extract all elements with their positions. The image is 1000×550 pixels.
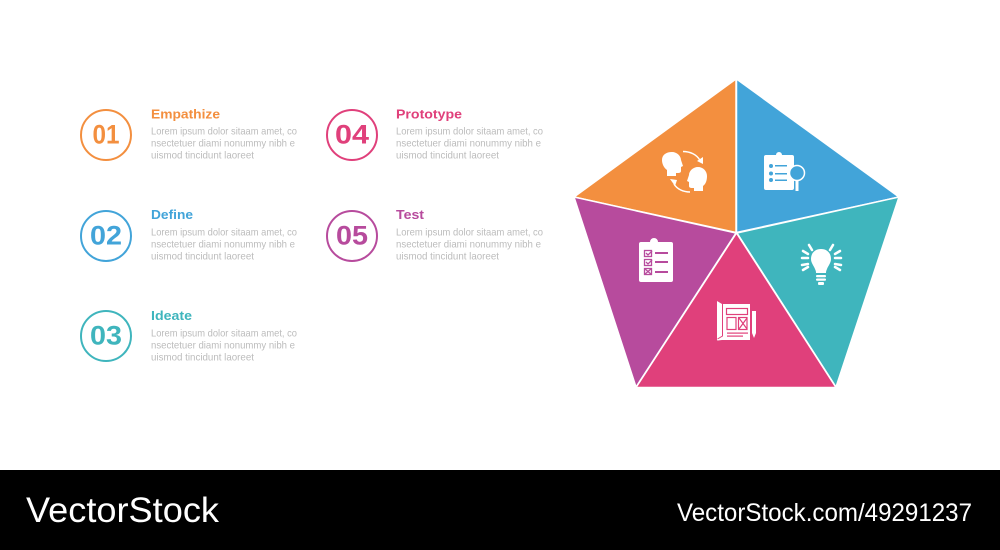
- number badge 02: [81, 211, 131, 261]
- description text: Lorem ipsum dolor sitaam amet, co: [396, 226, 543, 238]
- segment: purple: [574, 197, 736, 387]
- description text: [151, 328, 297, 364]
- description text: [396, 126, 543, 162]
- number badge 04: [327, 110, 377, 160]
- description text: [151, 226, 297, 262]
- description text: Lorem ipsum dolor sitaam amet, co: [151, 328, 297, 340]
- description text: uismod tincidunt laoreet: [151, 150, 254, 162]
- list item 01: Empathize: [81, 106, 297, 162]
- icon: clipboard with magnifier: [764, 152, 804, 191]
- number badge 02: 02: [90, 220, 122, 250]
- description text: [396, 226, 543, 262]
- logo text: VectorStock: [26, 491, 220, 530]
- pentagon chart: [574, 79, 899, 388]
- description text: nsectetuer diami nonummy nibh e: [396, 238, 541, 250]
- number badge 03: 03: [90, 320, 122, 350]
- heading: Empathize: Empathize: [151, 106, 220, 122]
- segment: teal: [737, 197, 899, 387]
- description text: uismod tincidunt laoreet: [151, 352, 254, 364]
- heading: Prototype: Prototype: [396, 106, 462, 122]
- footer bar: [0, 470, 1000, 550]
- segment: pink: [636, 233, 836, 388]
- description text: Lorem ipsum dolor sitaam amet, co: [151, 226, 297, 238]
- heading: Test: Test: [396, 207, 425, 222]
- number badge 04: 04: [335, 120, 369, 150]
- image id text: VectorStock.com/49291237: [677, 499, 972, 527]
- description text: nsectetuer diami nonummy nibh e: [151, 238, 295, 250]
- number badge 05: 05: [336, 220, 368, 250]
- icon: document blueprint with pencil: [717, 301, 756, 340]
- heading: Ideate: Ideate: [151, 308, 192, 323]
- list item 04: Prototype: [327, 106, 543, 162]
- number badge 03: [81, 311, 131, 361]
- description text: Lorem ipsum dolor sitaam amet, co: [396, 126, 543, 138]
- segment: blue: [736, 79, 899, 232]
- heading: Define: Define: [151, 207, 193, 222]
- description text: Lorem ipsum dolor sitaam amet, co: [151, 126, 297, 138]
- icon: light bulb: [802, 245, 841, 285]
- description text: nsectetuer diami nonummy nibh e: [151, 138, 295, 150]
- icon: checklist clipboard: [639, 238, 673, 282]
- list item 02: Define: [81, 207, 297, 262]
- description text: uismod tincidunt laoreet: [396, 150, 499, 162]
- icon: two heads with cycle arrows: [662, 152, 707, 192]
- description text: nsectetuer diami nonummy nibh e: [151, 340, 295, 352]
- list item 05: Test: [327, 207, 543, 262]
- number badge 01: [81, 110, 131, 160]
- number badge 01: 01: [92, 120, 120, 150]
- segment: orange: [574, 79, 736, 232]
- list item 03: Ideate: [81, 308, 297, 364]
- description text: uismod tincidunt laoreet: [151, 250, 254, 262]
- number badge 05: [327, 211, 377, 261]
- description text: [151, 126, 297, 162]
- description text: uismod tincidunt laoreet: [396, 250, 499, 262]
- description text: nsectetuer diami nonummy nibh e: [396, 138, 541, 150]
